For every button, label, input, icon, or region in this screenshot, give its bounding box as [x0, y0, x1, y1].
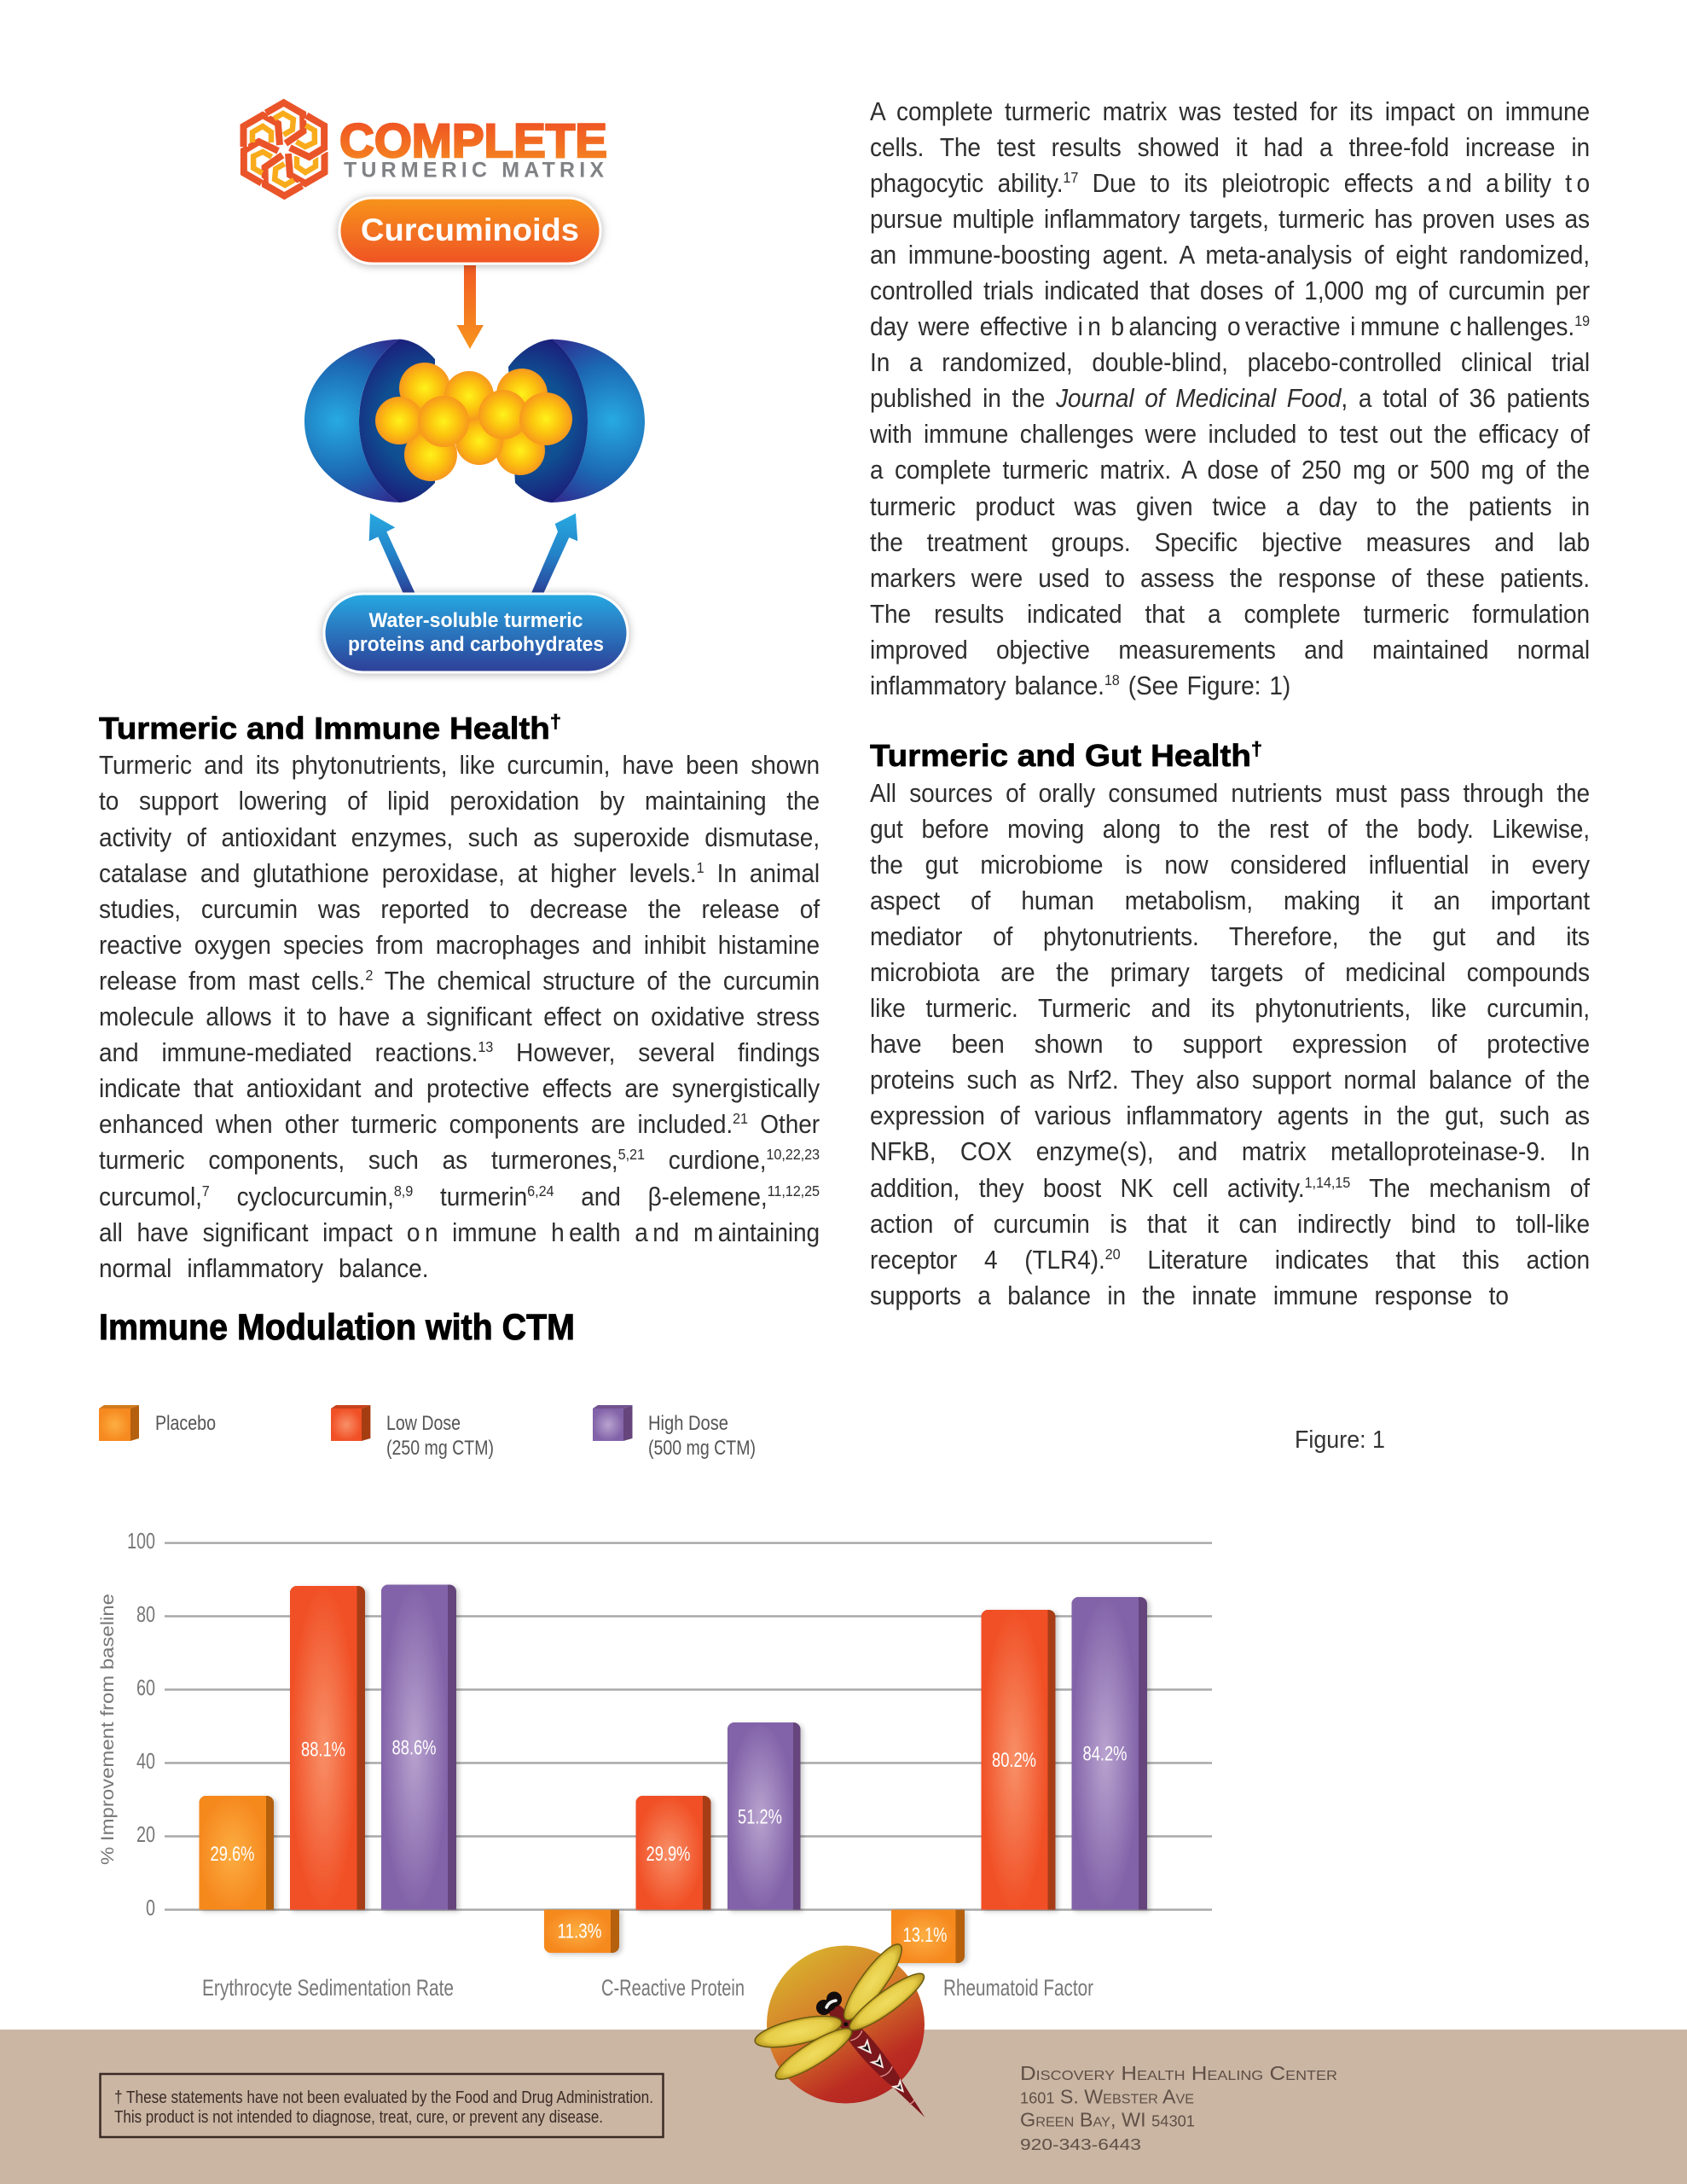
- pill: water-soluble proteins: proteins and carbohydrates: [348, 633, 604, 656]
- text block: turmeric and immune health body: enhanced when other turmeric components are included.21 Other: [99, 1110, 820, 1139]
- sun disc: [767, 1945, 925, 2104]
- text block: turmeric and gut health body: receptor 4 (TLR4).20 Literature indicates that this action: [870, 1246, 1590, 1275]
- text block: turmeric and immune health body: normal inflammatory balance.: [99, 1254, 428, 1283]
- heading: Turmeric and Immune Health: †: [550, 711, 561, 732]
- bars: c-reactive protein: [544, 1722, 800, 1953]
- grid and y axis: [127, 1530, 1212, 1920]
- arrow: curcuminoids down: [457, 265, 484, 349]
- grid and y axis: 0: [146, 1896, 155, 1920]
- legend: [99, 1405, 756, 1460]
- dragonfly body: [821, 1996, 932, 2123]
- address block: 920-343-6443: [1020, 2136, 1141, 2153]
- text block: turmeric and gut health body: aspect of human metabolism, making it an important: [870, 886, 1590, 915]
- bar value labels: 29.9%: [646, 1843, 691, 1866]
- text block: complete turmeric matrix trial: cells. The test results showed it had a three-fold increase in: [870, 133, 1590, 162]
- dragonfly wings: [752, 1938, 930, 2087]
- grid and y axis: 40: [136, 1750, 155, 1774]
- pill: water-soluble proteins: [324, 594, 628, 672]
- turmeric spheres: [375, 363, 572, 481]
- legend: high dose: High Dose: [648, 1412, 728, 1435]
- bar value labels: [210, 1737, 1128, 1947]
- text block: turmeric and immune health body: Turmeric and its phytonutrients, like curcumin, have been shown: [99, 751, 820, 780]
- text block: turmeric and gut health body: have been shown to support expression of protective: [870, 1030, 1590, 1059]
- category labels: [202, 1975, 1093, 2001]
- bar value labels: 80.2%: [992, 1749, 1036, 1772]
- text block: complete turmeric matrix trial: day were effective i n b alancing o veractive i mmune c hallenges.19: [870, 312, 1590, 341]
- text block: turmeric and immune health body: molecule allows it to have a significant effect on oxidative stress: [99, 1002, 820, 1031]
- logo: dragonfly on sun: [752, 1938, 932, 2123]
- address block: Green Bay, WI 54301: [1020, 2109, 1195, 2131]
- legend: high dose: [593, 1405, 756, 1460]
- text block: complete turmeric matrix trial: pursue multiple inflammatory targets, turmeric has proven uses as: [870, 205, 1590, 234]
- legend: low dose: Low Dose: [386, 1412, 461, 1435]
- right half cell: [508, 340, 645, 502]
- text block: turmeric and immune health body: curcumol,7 cyclocurcumin,8,9 turmerin6,24 and β-elemene,11,12,25: [99, 1182, 820, 1211]
- category labels: C-Reactive Protein: [601, 1975, 745, 2001]
- text block: turmeric and gut health body: like turmeric. Turmeric and its phytonutrients, like curcumin,: [870, 994, 1590, 1023]
- bar chart: immune modulation: [97, 1530, 1212, 2001]
- text block: turmeric and immune health body: [99, 751, 820, 1283]
- left half cell: [304, 340, 435, 502]
- heading: Turmeric and Immune Health: Turmeric and Immune Health: [99, 711, 519, 746]
- bar value labels: 29.6%: [210, 1843, 254, 1866]
- bars: erythrocyte sedimentation rate: [200, 1585, 456, 1909]
- text block: turmeric and immune health body: and immune-mediated reactions.13 However, several findings: [99, 1038, 820, 1067]
- wordmark: COMPLETE: [339, 113, 607, 167]
- bars: rheumatoid factor: [891, 1597, 1147, 1963]
- heading: Turmeric and Gut Health: Turmeric and Gut Health: [870, 738, 1226, 773]
- disclaimer box: [101, 2074, 664, 2137]
- dragonfly wing joint: [844, 2022, 848, 2026]
- text block: complete turmeric matrix trial: published in the Journal of Medicinal Food, a total of 36 patients: [870, 384, 1590, 413]
- text block: turmeric and immune health body: indicate that antioxidant and protective effects are synergistically: [99, 1074, 820, 1103]
- disclaimer box: This product is not intended to diagnose, treat, cure, or prevent any disease.: [114, 2107, 603, 2127]
- text block: complete turmeric matrix trial: phagocytic ability.17 Due to its pleiotropic effects a nd a bility t o: [870, 169, 1590, 198]
- icon: hexagon knot: [235, 97, 333, 201]
- text block: turmeric and gut health body: NFkB, COX enzyme(s), and matrix metalloproteinase-9. In: [870, 1137, 1590, 1166]
- grid and y axis: 80: [136, 1603, 155, 1627]
- pill: water-soluble proteins: Water-soluble turmeric: [368, 609, 583, 632]
- heading: Immune Modulation with CTM: Immune Modulation with CTM: [99, 1307, 575, 1348]
- text block: turmeric and immune health body: to support lowering of lipid peroxidation by maintaining the: [99, 787, 820, 816]
- logo: Complete Turmeric Matrix: [235, 97, 607, 201]
- text block: complete turmeric matrix trial: with immune challenges were included to test out the efficacy of: [870, 420, 1590, 449]
- text block: complete turmeric matrix trial: controlled trials indicated that doses of 1,000 mg of curcumin per: [870, 276, 1590, 305]
- address block: [1020, 2062, 1337, 2153]
- arrow: blue right up: [530, 514, 577, 595]
- bar value labels: 84.2%: [1083, 1742, 1128, 1766]
- footer band: [0, 2030, 1687, 2184]
- bar value labels: 88.1%: [301, 1739, 345, 1761]
- diagram: blue cells with turmeric spheres: [304, 340, 645, 502]
- text block: turmeric and gut health body: expression of various inflammatory agents in the gut, such as: [870, 1101, 1590, 1130]
- legend: high dose: (500 mg CTM): [648, 1437, 756, 1460]
- pill: Curcuminoids: [339, 198, 600, 264]
- text block: turmeric and gut health body: [870, 778, 1590, 1310]
- arrow: blue left up: [369, 514, 415, 595]
- tagline: TURMERIC MATRIX: [344, 159, 604, 183]
- pill: Curcuminoids: Curcuminoids: [361, 212, 579, 247]
- disclaimer box: † These statements have not been evaluated by the Food and Drug Administration.: [114, 2088, 653, 2107]
- address block: Discovery Health Healing Center: [1020, 2062, 1337, 2084]
- text block: turmeric and immune health body: reactive oxygen species from macrophages and inhibit histamine: [99, 931, 820, 960]
- text block: complete turmeric matrix trial: markers were used to assess the response of these patients.: [870, 564, 1590, 593]
- text block: turmeric and immune health body: turmeric components, such as turmerones,5,21 curdione,10,22,23: [99, 1146, 820, 1175]
- legend: placebo: Placebo: [155, 1412, 216, 1435]
- figure label: Figure: 1: [1295, 1426, 1385, 1454]
- text block: turmeric and immune health body: activity of antioxidant enzymes, such as superoxide dismutase,: [99, 823, 820, 852]
- text block: complete turmeric matrix trial: inflammatory balance.18 (See Figure: 1): [870, 671, 1290, 700]
- text block: turmeric and gut health body: addition, they boost NK cell activity.1,14,15 The mechanism of: [870, 1174, 1590, 1203]
- legend: placebo: [99, 1405, 216, 1441]
- text block: complete turmeric matrix trial: In a randomized, double-blind, placebo-controlled clinical trial: [870, 348, 1590, 377]
- text block: complete turmeric matrix trial: turmeric product was given twice a day to the patients in: [870, 492, 1590, 521]
- bar value labels: 11.3%: [558, 1920, 602, 1943]
- text block: complete turmeric matrix trial: The results indicated that a complete turmeric formulation: [870, 600, 1590, 629]
- legend: low dose: [331, 1405, 494, 1460]
- text block: complete turmeric matrix trial: a complete turmeric matrix. A dose of 250 mg or 500 mg of the: [870, 456, 1590, 485]
- axis title: % Improvement from baseline: [97, 1594, 118, 1865]
- heading: Turmeric and Gut Health: †: [1251, 738, 1262, 759]
- text block: complete turmeric matrix trial: the treatment groups. Specific bjective measures and lab: [870, 528, 1590, 557]
- text block: turmeric and gut health body: All sources of orally consumed nutrients must pass through the: [870, 778, 1590, 807]
- bar value labels: 51.2%: [738, 1805, 782, 1829]
- address block: 1601 S. Webster Ave: [1020, 2085, 1194, 2107]
- text block: turmeric and immune health body: release from mast cells.2 The chemical structure of the curcumin: [99, 967, 820, 996]
- text block: complete turmeric matrix trial: A complete turmeric matrix was tested for its impact on immune: [870, 97, 1590, 126]
- text block: turmeric and gut health body: proteins such as Nrf2. They also support normal balance of the: [870, 1066, 1590, 1095]
- bar value labels: 88.6%: [392, 1737, 437, 1759]
- text block: turmeric and gut health body: the gut microbiome is now considered influential in every: [870, 851, 1590, 880]
- grid and y axis: 20: [136, 1823, 155, 1847]
- text block: complete turmeric matrix trial: [870, 97, 1590, 700]
- text block: turmeric and immune health body: studies, curcumin was reported to decrease the release of: [99, 895, 820, 924]
- dragonfly head: [816, 1991, 842, 2015]
- grid and y axis: 100: [127, 1530, 155, 1554]
- category labels: Rheumatoid Factor: [943, 1975, 1093, 2001]
- bar value labels: 13.1%: [902, 1924, 947, 1947]
- category labels: Erythrocyte Sedimentation Rate: [202, 1975, 454, 2001]
- text block: complete turmeric matrix trial: improved objective measurements and maintained normal: [870, 636, 1590, 665]
- text block: turmeric and gut health body: action of curcumin is that it can indirectly bind to toll-like: [870, 1210, 1590, 1239]
- grid and y axis: 60: [136, 1676, 155, 1700]
- text block: turmeric and gut health body: gut before moving along to the rest of the body. Likewise,: [870, 815, 1590, 844]
- text block: turmeric and gut health body: supports a balance in the innate immune response to: [870, 1281, 1509, 1310]
- legend: low dose: (250 mg CTM): [386, 1437, 494, 1460]
- text block: complete turmeric matrix trial: an immune-boosting agent. A meta-analysis of eight randomized,: [870, 241, 1590, 270]
- text block: turmeric and immune health body: all have significant impact o n immune h ealth a nd m aintaining: [99, 1218, 820, 1247]
- text block: turmeric and immune health body: catalase and glutathione peroxidase, at higher levels.1 In animal: [99, 859, 820, 888]
- text block: turmeric and gut health body: microbiota are the primary targets of medicinal compounds: [870, 958, 1590, 987]
- text block: turmeric and gut health body: mediator of phytonutrients. Therefore, the gut and its: [870, 922, 1590, 951]
